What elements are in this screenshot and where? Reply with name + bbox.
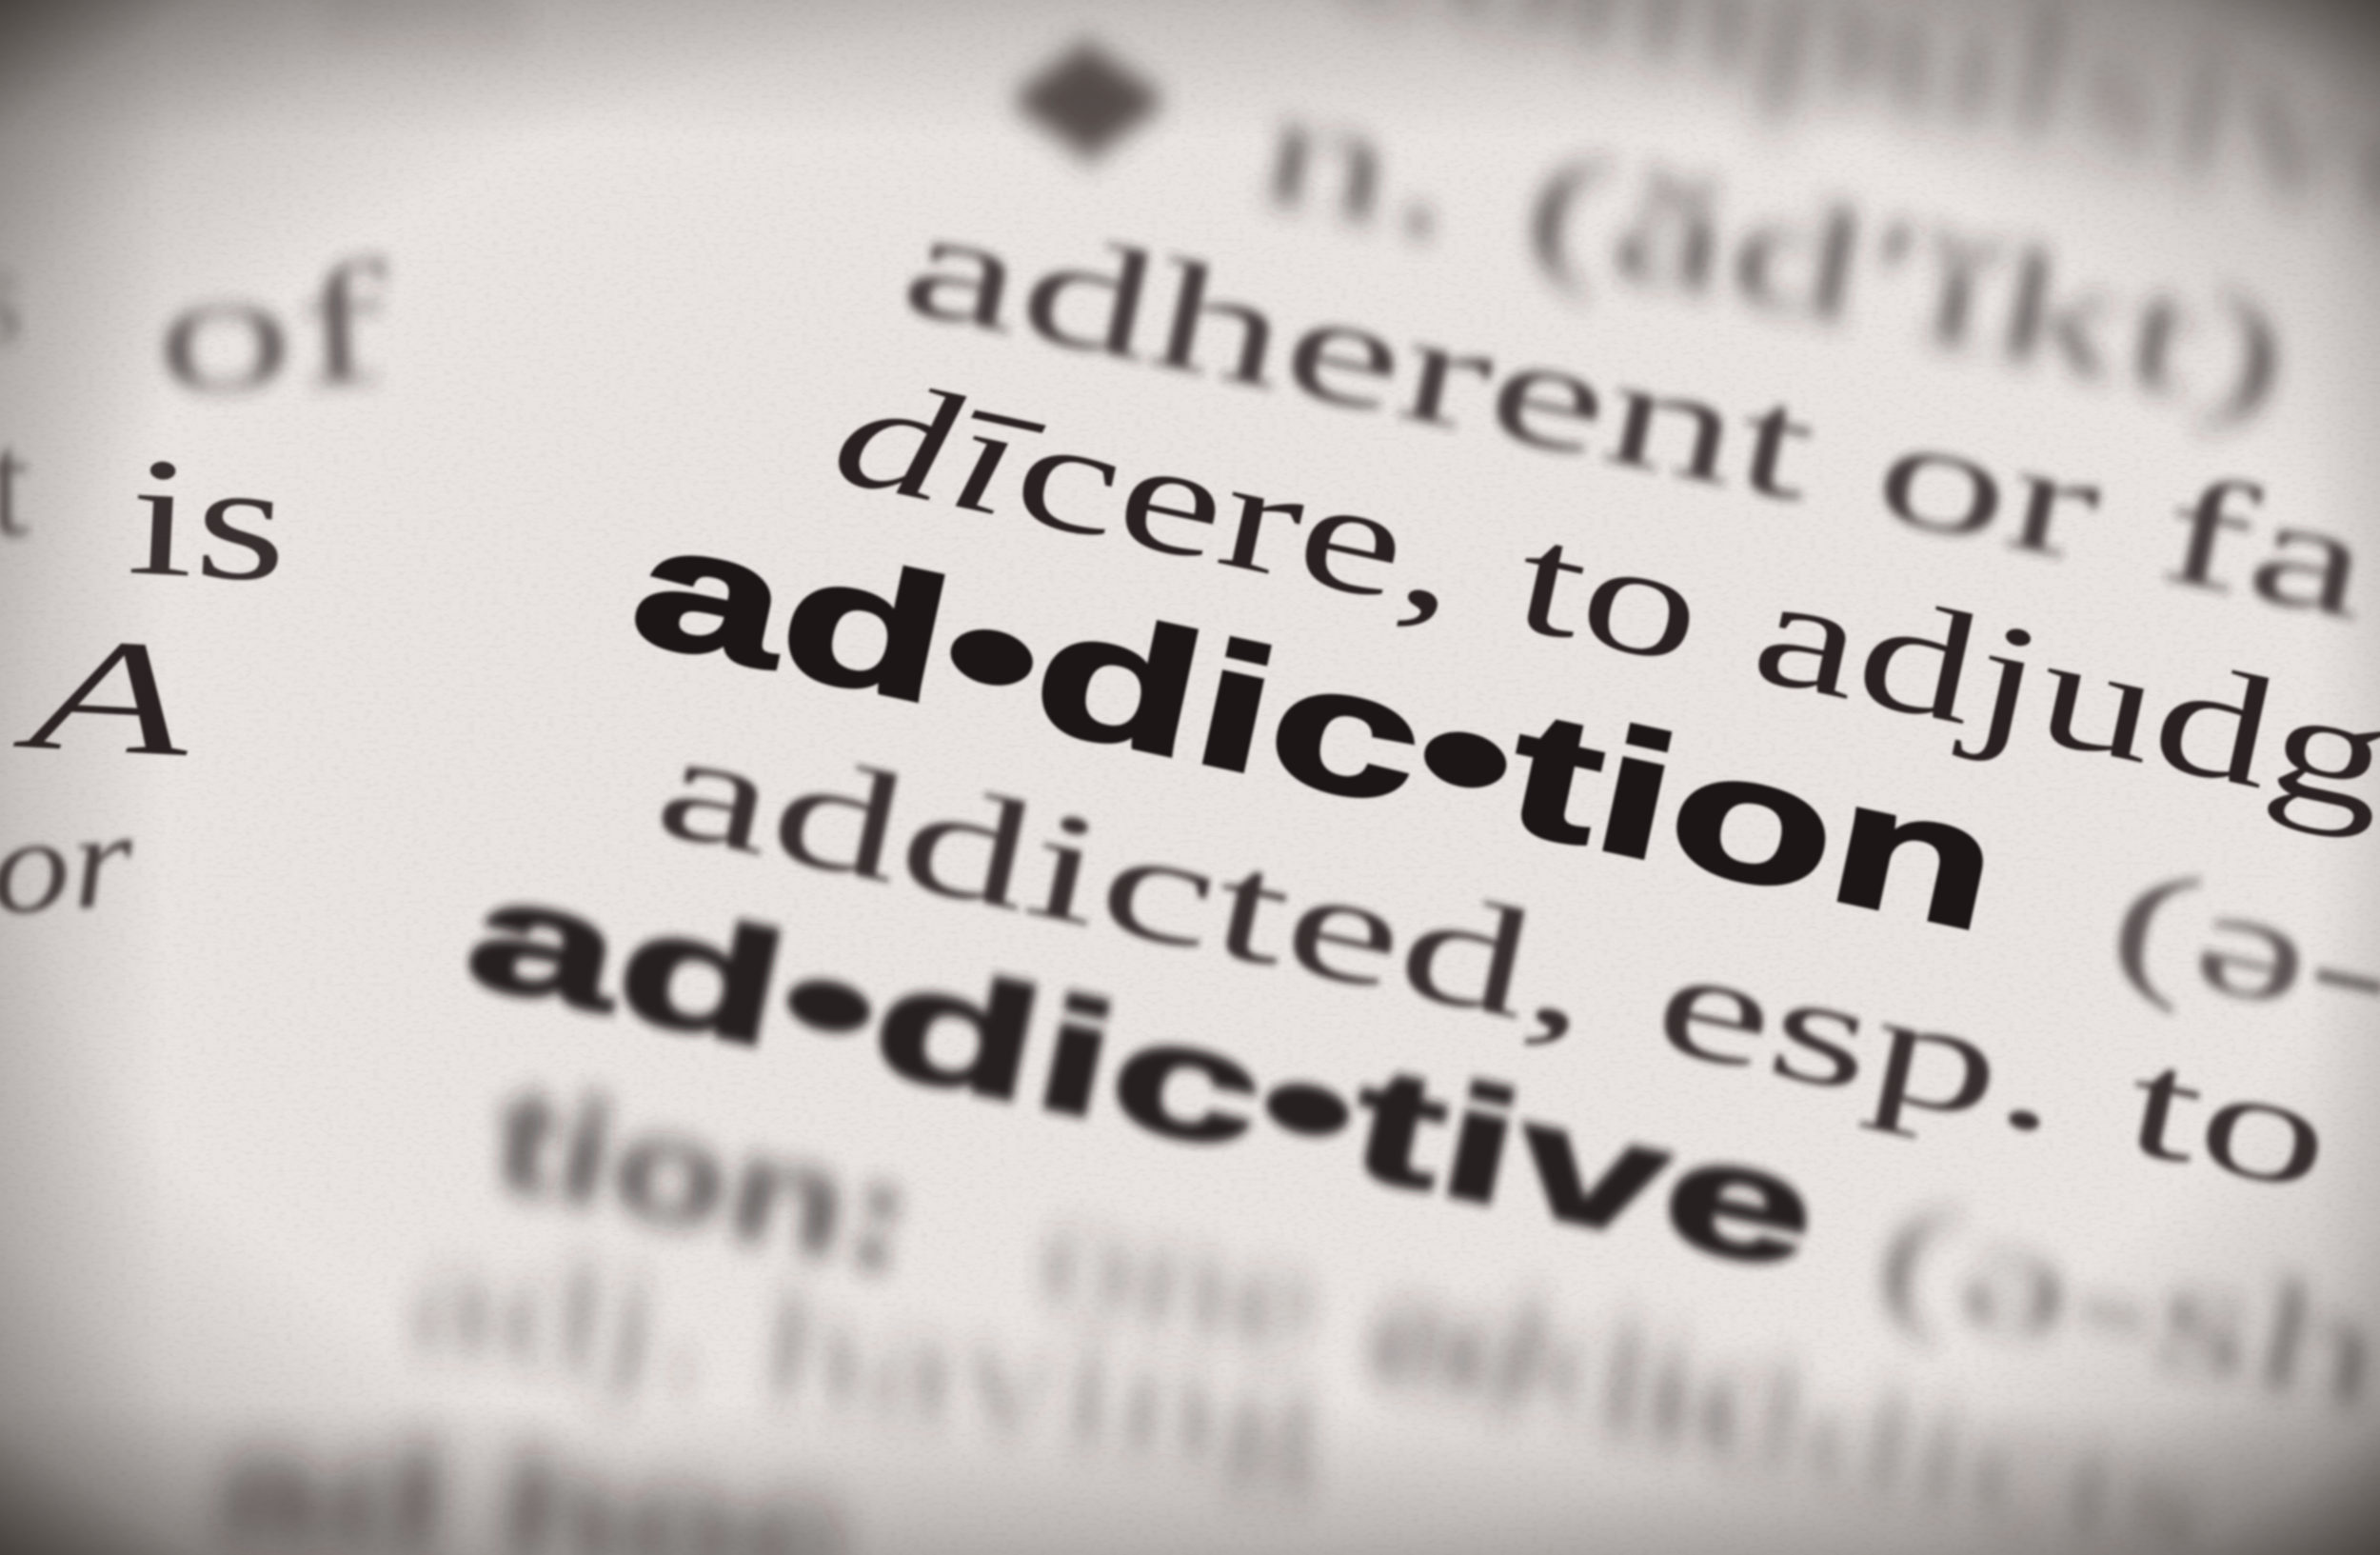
blurred line: tion: tion: [480, 1058, 927, 1300]
icon: blurred dictionary bullet [1008, 43, 1169, 161]
blurred line: addictive words: one addic [1026, 1173, 1800, 1483]
line: addicted, esp. to: addicted, esp. to [643, 696, 2348, 1225]
headword: ad-dic-tive: ad•dic•tive [452, 838, 1834, 1305]
blurred line: lower definition right: or addicts [1359, 1257, 2224, 1555]
headword: ad-dic-tion: ad•dic•tion [617, 483, 2016, 968]
line: adherent or fa: adherent or fa [888, 174, 2380, 652]
left column: of: of [149, 229, 394, 429]
pronunciation fragment: (ə- [2095, 834, 2380, 1058]
pronunciation fragment lower: (ə-sh [1860, 1168, 2380, 1440]
blurred line: lower definition: adj. having [398, 1217, 1337, 1500]
left column: is: is [124, 421, 293, 618]
left column: A: A [10, 602, 195, 791]
line: dicere, to adjudge: dīcere, to adjudg [820, 341, 2380, 847]
pronunciation line: n. (ăd′ĭkt) [1245, 60, 2305, 446]
